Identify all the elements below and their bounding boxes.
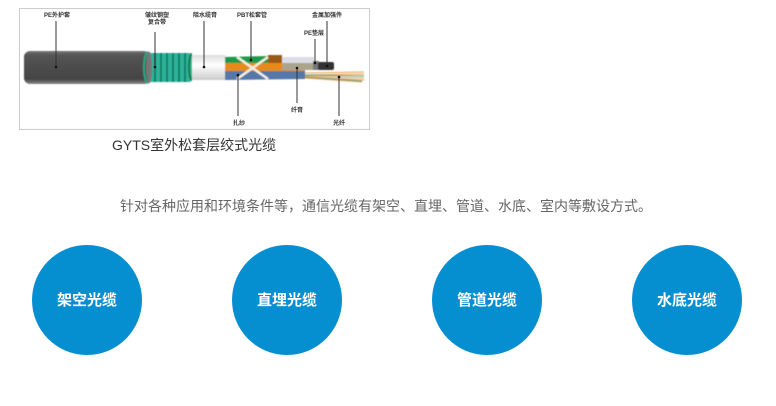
cable body (24, 51, 364, 84)
circle: 水底光缆: 水底光缆 (657, 292, 717, 309)
circle: 管道光缆: 管道光缆 (457, 292, 517, 309)
callout: 金属加强件 (312, 11, 342, 67)
callout: PE外护套: PE外护套 (44, 11, 70, 19)
circle: 架空光缆 (32, 245, 142, 355)
callout: 光纤: 光纤 (333, 119, 345, 127)
circle: 直埋光缆 (232, 245, 342, 355)
circle: 架空光缆: 架空光缆 (57, 292, 117, 309)
callout: 皱纹钢塑复合带: 皱纹钢塑 (145, 11, 169, 19)
cable diagram (19, 8, 370, 130)
callout: 扎纱 (233, 74, 245, 127)
callout: PE垫层 (304, 29, 324, 64)
callout: 阻水缆膏 (193, 11, 217, 68)
callout: 金属加强件: 金属加强件 (312, 11, 342, 19)
callout: PE外护套 (44, 11, 70, 68)
circle: 直埋光缆: 直埋光缆 (257, 292, 317, 309)
callout: PBT松套管: PBT松套管 (237, 11, 267, 19)
description text: 针对各种应用和环境条件等，通信光缆有架空、直埋、管道、水底、室内等敷设方式。 (120, 198, 652, 214)
callout: 皱纹钢塑复合带 (145, 11, 169, 68)
callout: 皱纹钢塑复合带: 复合带 (148, 18, 166, 26)
circle: 管道光缆 (432, 245, 542, 355)
callout: 扎纱: 扎纱 (233, 119, 245, 127)
callout: PBT松套管 (237, 11, 267, 61)
callout: PE垫层: PE垫层 (304, 29, 324, 37)
circle: 水底光缆 (632, 245, 742, 355)
callout: 光纤 (333, 76, 345, 127)
callout: 纤膏: 纤膏 (291, 106, 303, 114)
callout: 阻水缆膏: 阻水缆膏 (193, 11, 217, 19)
caption: GYTS室外松套层绞式光缆 (112, 137, 276, 153)
callout: 纤膏 (291, 67, 303, 114)
